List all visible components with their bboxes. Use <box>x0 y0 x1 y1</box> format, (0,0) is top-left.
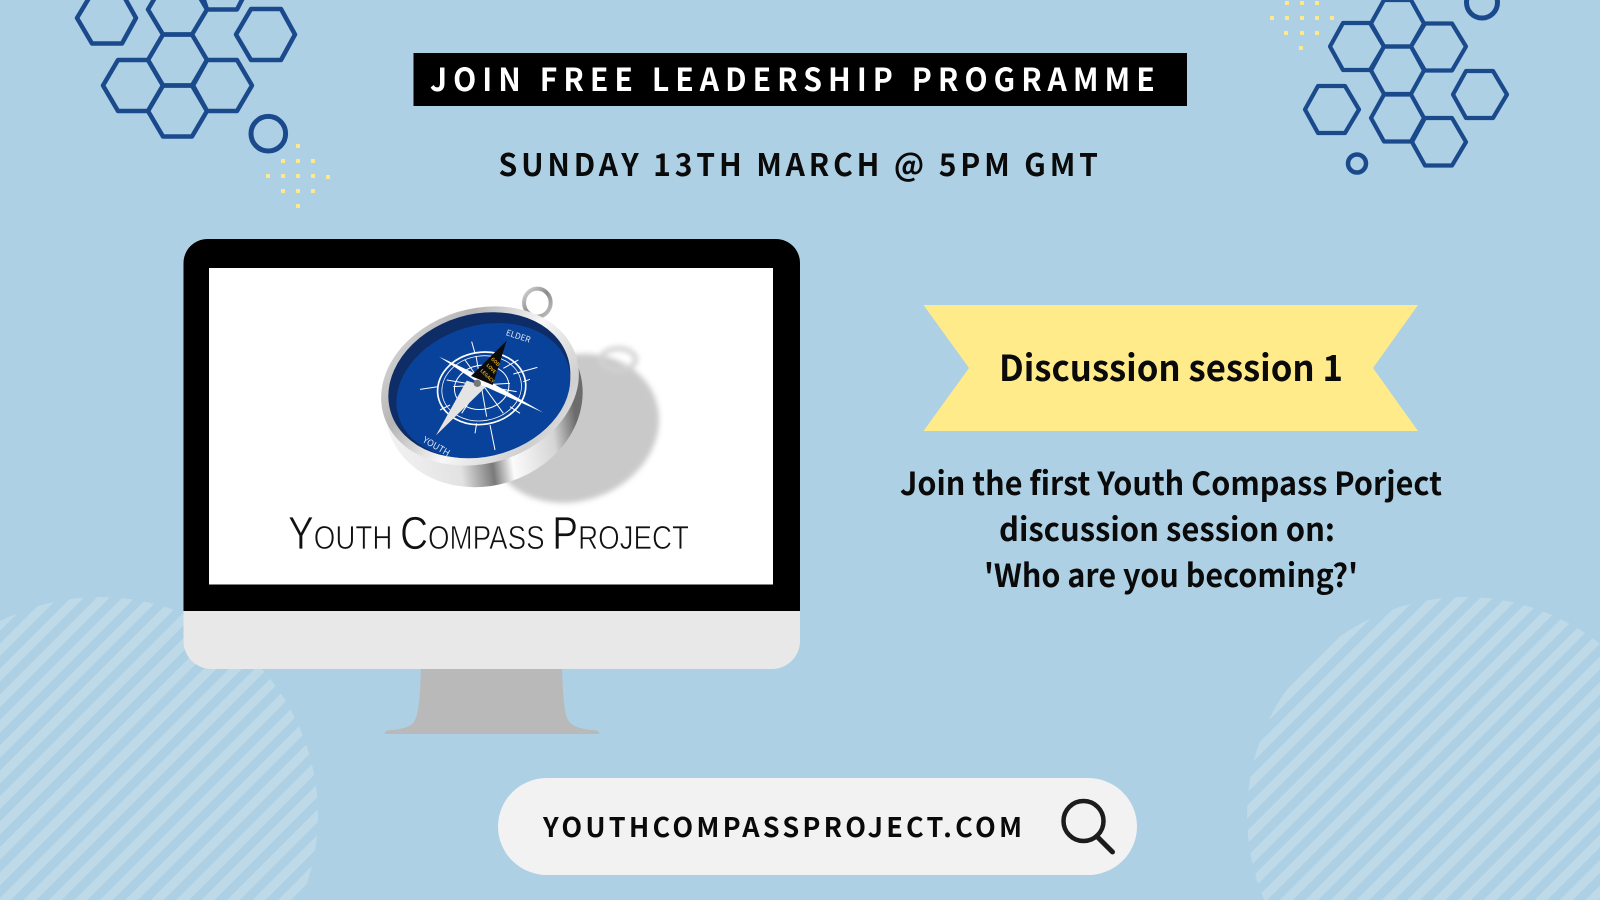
compass face <box>379 302 587 479</box>
compass shadow <box>466 330 680 526</box>
compass loop <box>524 289 551 317</box>
compass inscriptions <box>420 326 533 459</box>
compass inscriptions: GOD <box>489 357 501 368</box>
hexagon cluster top right <box>1305 0 1507 166</box>
hexagon cluster top left <box>77 0 295 136</box>
monitor chin <box>184 611 800 669</box>
monitor <box>184 239 800 734</box>
compass inscriptions: LOVE <box>485 363 497 376</box>
compass inscriptions: YOUTH <box>420 433 453 459</box>
monitor bezel <box>184 239 800 611</box>
yellow dots top left <box>266 144 330 208</box>
striped circle bottom right <box>1247 597 1600 900</box>
striped circle bottom left <box>0 597 318 900</box>
session description: 'Who are you becoming?' <box>984 551 1358 597</box>
search bar: YOUTHCOMPASSPROJECT.COM <box>542 806 1022 845</box>
search bar <box>498 778 1137 875</box>
compass face dark recess <box>370 290 589 480</box>
circle outline top right <box>1466 0 1498 18</box>
ribbon: discussion session <box>924 305 1418 431</box>
compass inscriptions: LEGACY <box>479 368 495 385</box>
compass body <box>363 289 605 512</box>
circle outline top left <box>251 116 286 151</box>
session description <box>900 459 1442 597</box>
compass rose <box>420 342 537 450</box>
yellow dots top right <box>1270 1 1334 50</box>
ribbon: discussion session: Discussion session 1 <box>999 340 1343 392</box>
monitor stand <box>385 669 599 734</box>
screen <box>209 268 773 584</box>
compass needles <box>436 341 543 435</box>
date line: SUNDAY 13TH MARCH @ 5PM GMT <box>498 140 1098 185</box>
session description: discussion session on: <box>999 505 1335 551</box>
logo wordmark: YOUTH COMPASS PROJECT <box>288 507 689 559</box>
session description: Join the first Youth Compass Porject <box>900 459 1442 505</box>
title banner: JOIN FREE LEADERSHIP PROGRAMME <box>430 54 1155 100</box>
compass inscriptions: ELDER <box>504 326 533 346</box>
compass rim <box>361 283 599 489</box>
icon: magnifier <box>1064 801 1112 852</box>
small circle outline <box>1348 154 1366 172</box>
logo compass <box>361 283 680 526</box>
